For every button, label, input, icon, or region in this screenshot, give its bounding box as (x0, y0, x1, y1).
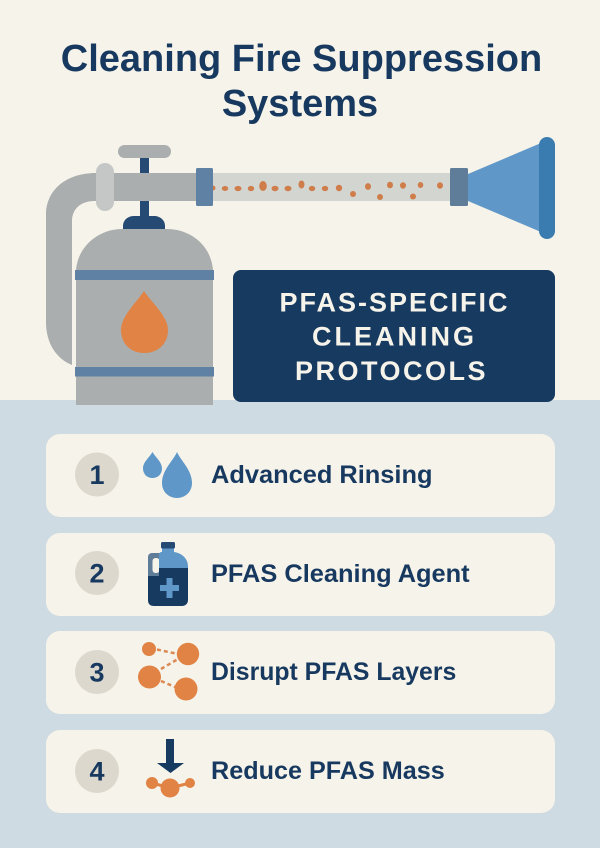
bottle shoulder (159, 548, 188, 570)
particles in tube (210, 180, 443, 200)
number 1 (75, 452, 119, 496)
pipe elbow (46, 173, 100, 365)
label: Disrupt PFAS Layers (211, 659, 456, 686)
horizontal pipe (100, 173, 198, 201)
title: Systems (222, 83, 378, 125)
panel: PFAS-specific cleaning protocols: CLEANING (312, 322, 477, 352)
number 4 (75, 749, 119, 793)
pipe collar (96, 163, 114, 211)
icon: down arrow (157, 739, 184, 773)
number 3 (75, 650, 119, 694)
tank bands (75, 270, 214, 376)
step 4 card: Reduce PFAS Mass (46, 730, 555, 813)
title (61, 38, 542, 125)
title: Cleaning Fire Suppression (61, 38, 542, 80)
bottle cap (161, 542, 175, 548)
bottle handle (148, 553, 163, 585)
panel: PFAS-specific cleaning protocols: PROTOCOLS (295, 356, 488, 386)
number 2: 2 (89, 558, 105, 588)
number 2 (75, 551, 119, 595)
number 3: 3 (89, 658, 105, 688)
icon: orange drop (121, 291, 168, 353)
step 1 card: Advanced Rinsing (46, 434, 555, 517)
pipe flanges (196, 168, 468, 206)
illustration: fire suppression tank and pipe (46, 137, 555, 405)
label: Reduce PFAS Mass (211, 757, 445, 785)
icon: water drops (143, 452, 192, 498)
number 1: 1 (89, 460, 105, 490)
cross (160, 578, 179, 598)
icon: reduced molecule (146, 777, 195, 798)
panel: PFAS-specific cleaning protocols: PFAS-SPECIFIC (279, 288, 510, 318)
icon: cleaning bottle (148, 542, 188, 606)
label: Advanced Rinsing (211, 461, 432, 489)
number 4: 4 (89, 756, 105, 786)
clear tube (213, 173, 451, 201)
label: PFAS Cleaning Agent (211, 560, 470, 588)
bottle liquid (148, 568, 188, 606)
nozzle (468, 137, 555, 239)
step 3 card: Disrupt PFAS Layers (46, 631, 555, 714)
step 2 card: PFAS Cleaning Agent (46, 533, 555, 616)
panel: PFAS-specific cleaning protocols (233, 270, 555, 402)
tank (76, 229, 213, 405)
valve handle (118, 145, 171, 229)
icon: separated molecules (138, 642, 199, 700)
